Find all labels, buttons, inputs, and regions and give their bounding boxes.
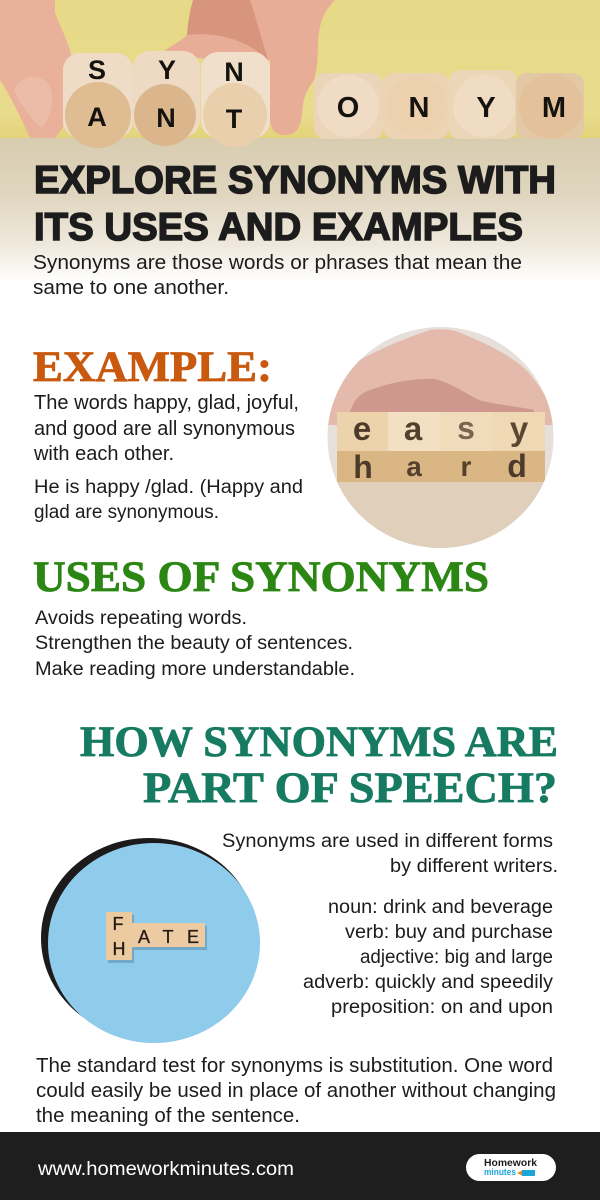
wooden blocks: r bbox=[461, 451, 472, 482]
die: Y bbox=[449, 70, 517, 139]
title: EXPLORE SYNONYMS WITH bbox=[34, 159, 556, 202]
example text bbox=[33, 392, 303, 523]
die: Y: Y bbox=[476, 92, 496, 124]
wooden blocks: d bbox=[507, 448, 527, 484]
die: S over A bbox=[63, 53, 133, 148]
speech intro text bbox=[222, 831, 558, 877]
die: S over A: S bbox=[88, 55, 106, 85]
intro text bbox=[33, 252, 522, 299]
wooden blocks: e bbox=[353, 410, 371, 447]
icon: right hand fingers bbox=[165, 0, 335, 135]
speech intro text: by different writers. bbox=[390, 856, 558, 877]
parts of speech list: adjective: big and large bbox=[360, 947, 553, 968]
example text: The words happy, glad, joyful, bbox=[34, 392, 299, 414]
die: M: M bbox=[542, 92, 566, 124]
wooden blocks: a bbox=[404, 410, 423, 447]
hero photo: synonym dice bbox=[0, 0, 600, 282]
heading: parts of speech: PART OF SPEECH? bbox=[143, 765, 557, 812]
photo: easy hard blocks bbox=[325, 325, 557, 552]
closing paragraph: The standard test for synonyms is substitution. One word bbox=[36, 1055, 553, 1077]
photo: fate blocks on blue circle bbox=[41, 838, 260, 1043]
letter tiles bbox=[106, 912, 205, 960]
uses list: Avoids repeating words. bbox=[35, 608, 247, 629]
wooden blocks: a bbox=[406, 451, 422, 482]
example text: and good are all synonymous bbox=[34, 418, 295, 440]
intro text: same to one another. bbox=[33, 277, 229, 299]
heading: uses of synonyms: USES OF SYNONYMS bbox=[33, 554, 489, 601]
example text: glad are synonymous. bbox=[34, 502, 219, 523]
parts of speech list: verb: buy and purchase bbox=[345, 922, 553, 943]
uses list: Make reading more understandable. bbox=[35, 659, 355, 680]
die: N: N bbox=[409, 92, 429, 124]
die: N over T bbox=[201, 52, 270, 147]
letter tiles: T bbox=[162, 927, 174, 947]
parts of speech list: noun: drink and beverage bbox=[328, 897, 553, 918]
wooden blocks: h bbox=[353, 449, 373, 485]
wooden blocks: y bbox=[510, 410, 529, 447]
letter tiles: E bbox=[187, 927, 199, 947]
footer bar bbox=[0, 1132, 600, 1200]
closing paragraph: could easily be used in place of another without changing bbox=[36, 1080, 556, 1102]
icon: pencil bbox=[517, 1170, 535, 1176]
title bbox=[34, 159, 556, 249]
example text: with each other. bbox=[33, 443, 174, 465]
die: N over T: N bbox=[224, 57, 244, 87]
uses list bbox=[35, 608, 355, 680]
closing paragraph bbox=[36, 1055, 556, 1127]
closing paragraph: the meaning of the sentence. bbox=[36, 1105, 300, 1127]
die: N over T: T bbox=[226, 104, 243, 134]
letter tiles: H bbox=[112, 939, 126, 959]
letter tiles: A bbox=[138, 927, 150, 947]
icon: left hand thumb bbox=[0, 0, 72, 138]
letter tiles: F bbox=[112, 914, 124, 934]
uses list: Strengthen the beauty of sentences. bbox=[35, 633, 353, 654]
example text: He is happy /glad. (Happy and bbox=[34, 477, 303, 498]
die: O bbox=[314, 73, 383, 139]
website url: www.homeworkminutes.com bbox=[37, 1159, 294, 1180]
heading: parts of speech: HOW SYNONYMS ARE bbox=[80, 719, 558, 766]
die: Y over N: N bbox=[156, 103, 176, 133]
speech intro text: Synonyms are used in different forms bbox=[222, 831, 553, 852]
parts of speech list bbox=[303, 897, 554, 1018]
logo pill: Homework bbox=[484, 1158, 537, 1169]
parts of speech list: preposition: on and upon bbox=[331, 997, 553, 1018]
logo pill bbox=[466, 1154, 556, 1181]
die: S over A: A bbox=[87, 102, 107, 132]
parts of speech list: adverb: quickly and speedily bbox=[303, 972, 554, 993]
heading: parts of speech bbox=[80, 719, 558, 812]
wooden blocks bbox=[337, 410, 545, 485]
die: Y over N: Y bbox=[158, 55, 176, 85]
wooden blocks: s bbox=[457, 410, 475, 446]
die: Y over N bbox=[133, 51, 200, 146]
title: ITS USES AND EXAMPLES bbox=[34, 206, 523, 249]
intro text: Synonyms are those words or phrases that mean the bbox=[33, 252, 522, 274]
heading: example: EXAMPLE: bbox=[33, 344, 272, 391]
tile shadow bbox=[108, 915, 207, 963]
die: M bbox=[516, 73, 584, 139]
logo pill: minutes bbox=[484, 1167, 516, 1177]
die: N bbox=[383, 73, 449, 139]
die: O: O bbox=[337, 92, 359, 124]
